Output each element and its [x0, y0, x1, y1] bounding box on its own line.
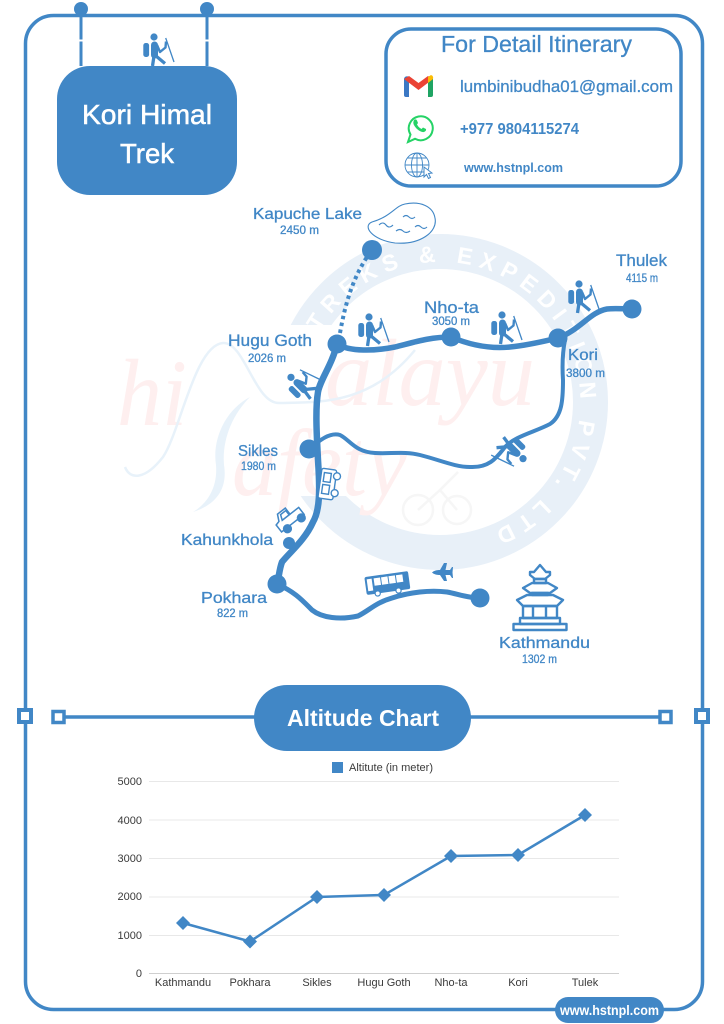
- panel: contact details: www.hstnpl.com: [463, 160, 563, 175]
- y axis labels: 3000: [118, 853, 142, 865]
- icon: Kathmandu temple: [514, 565, 566, 630]
- icon: globe with cursor: [405, 153, 432, 178]
- label: Kapuche Lake: Kapuche Lake: [253, 206, 362, 223]
- label: Pokhara: Pokhara: [201, 590, 267, 607]
- title sign: [57, 2, 237, 195]
- watermark: faint cyclist: [403, 472, 471, 525]
- label: Nho-ta: 3050 m: [432, 316, 470, 328]
- label: Thulek: Thulek: [616, 252, 668, 270]
- x axis labels: Nho-ta: [434, 977, 468, 989]
- label: Kapuche Lake: [253, 206, 362, 237]
- label: Thulek: [616, 252, 668, 285]
- title sign: Kori Himal: [82, 99, 212, 130]
- label: Kori: [566, 347, 605, 380]
- footer website badge: www.hstnpl.com: [559, 1003, 659, 1018]
- label: Thulek: 4115 m: [626, 273, 658, 285]
- label: Kori: Kori: [568, 347, 598, 364]
- x axis labels: Tulek: [572, 977, 599, 989]
- x axis labels: Sikles: [302, 977, 332, 989]
- route: stop markers: [268, 240, 642, 608]
- label: Kapuche Lake: 2450 m: [280, 225, 319, 237]
- label: Sikles: Sikles: [238, 443, 278, 460]
- label: Nho-ta: Nho-ta: [424, 299, 480, 317]
- y axis labels: 5000: [118, 776, 142, 788]
- label: Pokhara: [201, 590, 267, 620]
- panel: contact details: [386, 29, 681, 186]
- panel: contact details: +977 9804115274: [460, 121, 579, 138]
- icon: plane: [432, 563, 453, 581]
- line chart: altitude: [118, 762, 619, 989]
- icon: jeep on road: [318, 468, 341, 501]
- label: Sikles: [238, 443, 278, 473]
- x axis labels: Pokhara: [230, 977, 271, 989]
- icon: hiker on sign: [143, 33, 174, 66]
- panel: contact details: lumbinibudha01@gmail.com: [460, 77, 673, 96]
- watermark: script lettering: hi: [117, 340, 187, 446]
- icon: jeep near Kahunkhola: [271, 501, 307, 536]
- label: Hugu Goth: 2026 m: [248, 353, 286, 365]
- watermark: logo ring: TREKS & EXPEDITION PVT. LTD: [306, 246, 596, 542]
- label: Sikles: 1980 m: [241, 461, 276, 473]
- icon: lake: [368, 203, 435, 243]
- watermark: script lettering: [117, 320, 535, 516]
- icon: hiker near Thulek: [568, 280, 599, 313]
- icon: climber near Hugu Goth: [281, 361, 326, 405]
- label: Hugu Goth: Hugu Goth: [228, 332, 312, 350]
- label: Kahunkhola: Kahunkhola: [181, 532, 273, 549]
- x axis labels: Kathmandu: [155, 977, 211, 989]
- label: Kathmandu: [499, 635, 590, 666]
- y axis labels: 2000: [118, 891, 142, 903]
- icon: hiker east of Nho-ta: [491, 311, 522, 344]
- footer website badge: [555, 997, 664, 1023]
- icon: gmail: [404, 75, 433, 97]
- data line: [176, 808, 592, 948]
- heading: Altitude Chart: Altitude Chart: [287, 705, 439, 731]
- x axis labels: Hugu Goth: [357, 977, 411, 989]
- icon: climber on lower trail: [488, 431, 533, 475]
- icon: bus: [364, 571, 411, 598]
- title sign: Trek: [120, 138, 175, 169]
- y axis labels: 4000: [118, 815, 142, 827]
- x axis labels: Kori: [508, 977, 528, 989]
- y axis labels: [118, 776, 142, 980]
- route: main trail: [277, 309, 632, 618]
- label: Kathmandu: Kathmandu: [499, 635, 590, 652]
- label: Kori: 3800 m: [566, 368, 605, 380]
- label: Nho-ta: [424, 299, 480, 328]
- route: dotted lake spur: [340, 257, 367, 333]
- label: Hugu Goth: [228, 332, 312, 365]
- y axis labels: 0: [136, 968, 142, 980]
- icon: whatsapp: [408, 116, 433, 142]
- watermark: script lettering: afety: [232, 410, 408, 516]
- panel: contact details: For Detail Itinerary: [441, 31, 632, 57]
- icon: hiker west of Nho-ta: [358, 313, 389, 346]
- x axis labels: [155, 977, 599, 989]
- heading: Altitude Chart: [53, 685, 671, 751]
- label: Kathmandu: 1302 m: [522, 654, 557, 666]
- chart legend: Altitute (in meter): [349, 762, 433, 774]
- y axis labels: 1000: [118, 930, 142, 942]
- watermark: script lettering: alayu: [325, 320, 535, 426]
- label: Pokhara: 822 m: [217, 608, 248, 620]
